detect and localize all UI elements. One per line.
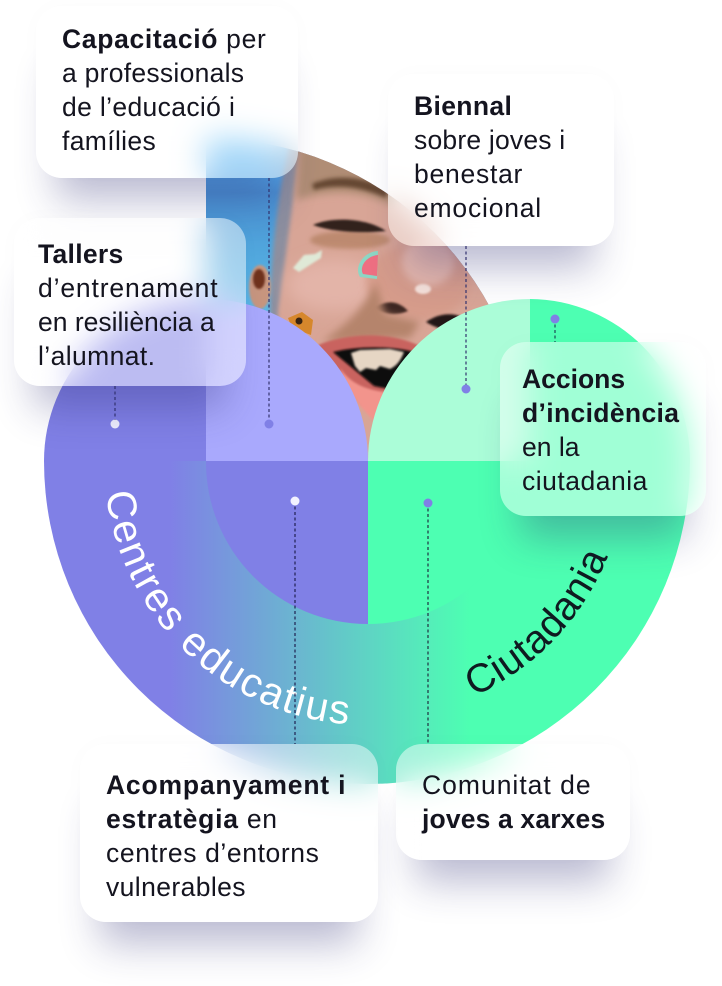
- card: Comunitat: joves a xarxes: [422, 804, 605, 834]
- card: Tallers: d’entrenament: [38, 273, 218, 303]
- connector: Comunitat: [424, 498, 432, 744]
- card: Comunitat: Comunitat de: [422, 770, 592, 800]
- shape: upper left dark purple dome: [44, 299, 206, 461]
- card: Accions: en la: [522, 432, 579, 462]
- chart: circular diagram: [44, 119, 706, 803]
- label: Centres educatius: Centres educatius: [108, 492, 348, 724]
- photo: laughing face with stickers: [206, 130, 540, 470]
- card: Biennal: Biennal: [414, 91, 512, 121]
- icon: watermelon sticker: [358, 251, 378, 279]
- connector: Capacitació: [264, 178, 274, 428]
- shape: upper left light purple dome: [206, 299, 368, 461]
- card: Capacitació: famílies: [62, 126, 156, 156]
- card: Acompanyament: [80, 744, 378, 922]
- shape: lower half circle gradient: [44, 461, 690, 784]
- shape: lower inner green quarter: [368, 461, 530, 624]
- card: Biennal: sobre joves i: [414, 125, 565, 155]
- card: Comunitat: [396, 744, 630, 860]
- connector: Biennal: [462, 246, 470, 394]
- card: Tallers: Tallers: [38, 239, 124, 269]
- card: Acompanyament: vulnerables: [106, 872, 246, 902]
- connector: Tallers: [110, 386, 120, 428]
- card: Accions: d’incidència: [522, 398, 679, 428]
- card: Acompanyament: centres d’entorns: [106, 838, 319, 868]
- card: Tallers: [14, 218, 246, 386]
- connector: Acompanyament: [290, 496, 300, 744]
- card: Capacitació: de l’educació i: [62, 92, 235, 122]
- icon: fish sticker: [293, 250, 322, 272]
- card: Accions: ciutadania: [522, 466, 648, 496]
- label: Ciutadania: Ciutadania: [467, 552, 608, 692]
- card: Capacitació: Capacitació per: [62, 24, 266, 54]
- card: Biennal: emocional: [414, 193, 542, 223]
- card: Biennal: benestar: [414, 159, 523, 189]
- card: Tallers: l’alumnat.: [38, 341, 155, 371]
- card: Capacitació: a professionals: [62, 58, 244, 88]
- card: Acompanyament: estratègia en: [106, 804, 278, 834]
- card: Biennal: [388, 74, 614, 246]
- shape: upper right light green dome: [368, 299, 530, 461]
- connector: Accions: [550, 314, 560, 342]
- card: Tallers: en resiliència a: [38, 307, 215, 337]
- shape: upper right green dome: [530, 299, 690, 461]
- card: Accions: [500, 342, 706, 516]
- shape: lower inner purple quarter: [206, 461, 368, 624]
- icon: ear: [249, 265, 271, 309]
- card: Acompanyament: Acompanyament i: [106, 770, 346, 800]
- icon: orange flower sticker: [288, 312, 313, 335]
- card: Capacitació: [36, 6, 298, 178]
- card: Accions: Accions: [522, 364, 625, 394]
